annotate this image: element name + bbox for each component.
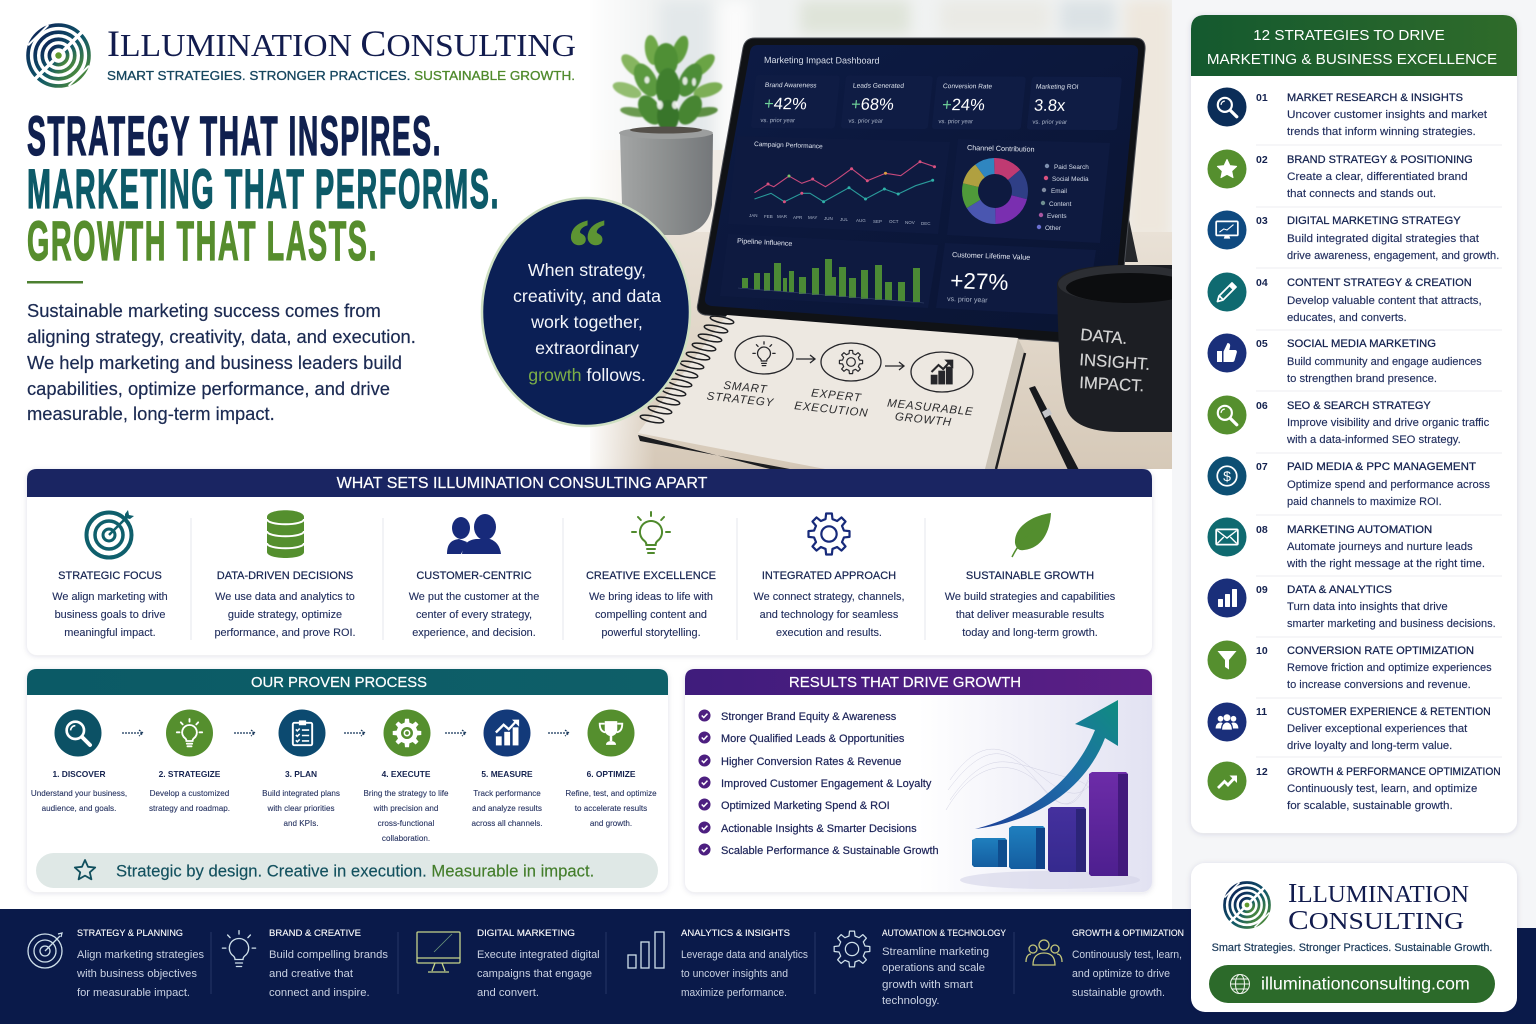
strategy 10: Remove friction and optimize experiences: [1287, 662, 1492, 674]
pipeline influence bar chart: Pipeline Influence: [737, 238, 793, 248]
results checklist: Optimized Marketing Spend & ROI: [721, 800, 890, 812]
strategy 03: DIGITAL MARKETING STRATEGY: [1287, 215, 1461, 227]
sketch: measurable growth: GROWTH: [894, 411, 952, 429]
footer: growth & optimization: Continouusly test, learn,: [1072, 949, 1182, 961]
arrow: [445, 730, 466, 736]
step 1 discover: [31, 710, 127, 813]
campaign performance line chart: [728, 136, 950, 234]
step 6 optimize: to accelerate results: [575, 804, 647, 813]
channel contribution donut: Paid Search: [1054, 164, 1089, 171]
process heading: [27, 669, 668, 695]
strategy 01: MARKET RESEARCH & INSIGHTS: [1287, 92, 1463, 104]
sketch arrow: [885, 362, 904, 370]
footer: analytics & insights: ANALYTICS & INSIGHTS: [681, 928, 790, 938]
sustainable growth: that deliver measurable results: [956, 609, 1105, 621]
strategy 01: [1208, 88, 1488, 138]
arrow: [344, 730, 365, 736]
step 4 execute: cross-functional: [378, 819, 435, 828]
headline: STRATEGY THAT INSPIRES.: [27, 104, 442, 167]
strategy 06: [1208, 396, 1490, 446]
strategic focus: [52, 510, 168, 639]
channel contribution donut: Social Media: [1052, 176, 1089, 183]
KPI cards: Marketing ROI: [1036, 84, 1079, 91]
quote text: extraordinary: [535, 338, 639, 358]
step 4 execute: Bring the strategy to life: [363, 789, 449, 798]
strategy 06: 06: [1256, 400, 1268, 412]
brand tagline: SMART STRATEGIES. STRONGER PRACTICES. SUSTAINABLE GROWTH.: [107, 68, 575, 83]
callout bar: [36, 853, 658, 888]
strategy 04: educates, and converts.: [1287, 312, 1407, 324]
strategy 12: GROWTH & PERFORMANCE OPTIMIZATION: [1287, 766, 1501, 778]
intro paragraph: Sustainable marketing success comes from: [27, 300, 381, 321]
results checklist: [698, 709, 939, 857]
strategy 03: [1208, 210, 1499, 262]
integrated approach: We connect strategy, channels,: [754, 591, 904, 603]
panel: 12 strategies: [1191, 15, 1517, 833]
KPI cards: Conversion Rate: [943, 83, 993, 90]
step 4 execute: 4. EXECUTE: [382, 769, 431, 779]
tablet with marketing dashboard: [697, 38, 1145, 345]
card brand name: CONSULTING: [1288, 905, 1464, 935]
strategy 07: [1208, 456, 1490, 508]
strategy 12: for scalable, sustainable growth.: [1287, 800, 1453, 812]
campaign performance line chart: JUL: [840, 217, 848, 222]
customer lifetime value: vs. prior year: [947, 296, 988, 304]
footer: growth & optimization: GROWTH & OPTIMIZATION: [1072, 928, 1184, 938]
campaign performance line chart: JUN: [824, 216, 833, 221]
spiral binding: [640, 315, 734, 424]
creative excellence: We bring ideas to life with: [589, 591, 713, 603]
step 4 execute: [363, 710, 449, 843]
callout bar: Strategic by design. Creative in execution. Measurable in impact.: [116, 862, 594, 880]
strategy 03: drive awareness, engagement, and growth.: [1287, 250, 1499, 262]
coffee mug: Data. Insight. Impact.: IMPACT.: [1079, 373, 1145, 395]
step 4 execute: with precision and: [373, 804, 438, 813]
step 3 plan: Build integrated plans: [262, 789, 340, 798]
intro paragraph: We help marketing and business leaders build: [27, 352, 402, 373]
strategy 10: to increase conversions and revenue.: [1287, 679, 1471, 691]
footer: strategy & planning: [28, 928, 205, 999]
quote text: creativity, and data: [513, 286, 661, 306]
strategy 07: PAID MEDIA & PPC MANAGEMENT: [1287, 461, 1476, 473]
footer: digital marketing: campaigns that engage: [477, 968, 592, 980]
sketch: expert execution: EXECUTION: [794, 400, 869, 420]
step 3 plan: [262, 710, 340, 828]
footer: growth & optimization: [1026, 928, 1184, 999]
strategy 05: [1208, 334, 1482, 385]
strategic focus: We align marketing with: [52, 591, 168, 603]
sketch: smart strategy: SMART: [723, 380, 768, 396]
results checklist: Stronger Brand Equity & Awareness: [721, 711, 897, 723]
step 3 plan: with clear priorities: [266, 804, 335, 813]
footer: analytics & insights: to uncover insights and: [681, 968, 788, 980]
customer-centric: We put the customer at the: [409, 591, 539, 603]
footer: brand & creative: [222, 928, 389, 999]
campaign performance line chart: AUG: [856, 218, 866, 223]
coffee mug: Data. Insight. Impact.: DATA.: [1080, 325, 1128, 348]
KPI cards: [751, 75, 1122, 130]
logo icon: [28, 25, 89, 86]
KPI cards: vs. prior year: [760, 118, 795, 124]
strategy 08: [1208, 518, 1485, 570]
intro paragraph: aligning strategy, creativity, data, and execution.: [27, 326, 416, 347]
card brand name: [1288, 878, 1469, 935]
strategy 04: CONTENT STRATEGY & CREATION: [1287, 277, 1472, 289]
campaign performance line chart: APR: [793, 215, 803, 220]
strategy 06: Improve visibility and drive organic traffic: [1287, 417, 1490, 429]
creative excellence: compelling content and: [595, 609, 707, 621]
strategy 07: 07: [1256, 461, 1268, 473]
footer: digital marketing: Execute integrated digital: [477, 949, 600, 961]
quote text: growth follows.: [528, 365, 646, 385]
strategy 07: paid channels to maximize ROI.: [1287, 496, 1442, 508]
strategic focus: business goals to drive: [55, 609, 165, 621]
campaign performance line chart: FEB: [764, 214, 773, 219]
step 6 optimize: 6. OPTIMIZE: [587, 769, 636, 779]
integrated approach: execution and results.: [776, 627, 882, 639]
integrated approach: and technology for seamless: [760, 609, 899, 621]
strategy 09: [1208, 578, 1496, 630]
strategy 11: CUSTOMER EXPERIENCE & RETENTION: [1287, 706, 1491, 718]
strategy 11: 11: [1256, 706, 1267, 718]
footer: growth & optimization: sustainable growth.: [1072, 987, 1165, 999]
growth chart with arrow: [946, 700, 1140, 889]
campaign performance line chart: OCT: [889, 219, 899, 224]
quote text: [513, 260, 661, 385]
sketch: smart strategy: [706, 336, 793, 410]
strategy 11: drive loyalty and long-term value.: [1287, 740, 1452, 752]
footer band: [0, 909, 1536, 1024]
spiral notebook: [638, 315, 1025, 469]
strategy 02: BRAND STRATEGY & POSITIONING: [1287, 154, 1473, 166]
campaign performance line chart: SEP: [873, 219, 882, 224]
customer-centric: center of every strategy,: [416, 609, 532, 621]
strategy 04: Develop valuable content that attracts,: [1287, 295, 1482, 307]
campaign performance line chart: JAN: [749, 213, 758, 218]
quote mark: “: [568, 205, 606, 289]
quote text: work together,: [530, 312, 643, 332]
data-driven decisions: We use data and analytics to: [215, 591, 355, 603]
pen: [1029, 386, 1079, 470]
sketch: expert execution: EXPERT: [811, 387, 862, 405]
strategy 05: to strengthen brand presence.: [1287, 373, 1437, 385]
logo card: [1191, 863, 1517, 1012]
step 5 measure: across all channels.: [471, 819, 543, 828]
coffee mug: Data. Insight. Impact.: [1057, 265, 1198, 432]
strategy 10: CONVERSION RATE OPTIMIZATION: [1287, 645, 1474, 657]
strategic focus: STRATEGIC FOCUS: [58, 570, 162, 582]
footer: strategy & planning: Align marketing strategies: [77, 949, 205, 961]
strategy 06: with a data-informed SEO strategy.: [1286, 434, 1461, 446]
strategy 05: Build community and engage audiences: [1287, 356, 1482, 368]
KPI cards: vs. prior year: [938, 119, 973, 125]
data-driven decisions: DATA-DRIVEN DECISIONS: [217, 570, 353, 582]
headline: [27, 104, 500, 272]
customer-centric: experience, and decision.: [412, 627, 536, 639]
step 6 optimize: Refine, test, and optimize: [565, 789, 657, 798]
results heading: [685, 669, 1152, 695]
campaign performance line chart: Campaign Performance: [754, 141, 823, 150]
step 3 plan: and KPIs.: [283, 819, 319, 828]
strategy 03: Build integrated digital strategies that: [1287, 233, 1480, 245]
strategy 09: Turn data into insights that drive: [1287, 601, 1448, 613]
creative excellence: CREATIVE EXCELLENCE: [586, 570, 716, 582]
strategy 02: [1208, 150, 1473, 200]
data-driven decisions: performance, and prove ROI.: [214, 627, 356, 639]
step 5 measure: 5. MEASURE: [481, 769, 533, 779]
channel contribution donut: Email: [1051, 188, 1067, 195]
hero photo: desk scene: [585, 0, 1172, 469]
sketch arrow: [796, 355, 815, 363]
strategy 02: Create a clear, differentiated brand: [1287, 171, 1468, 183]
strategy 12: [1208, 762, 1501, 812]
step 2 strategize: 2. STRATEGIZE: [159, 769, 221, 779]
strategy 01: Uncover customer insights and market: [1287, 109, 1488, 121]
data-driven decisions: [214, 510, 356, 639]
sketch: measurable growth: [887, 352, 974, 429]
footer: analytics & insights: Leverage data and analytics: [681, 949, 809, 961]
apart heading: [27, 469, 1152, 497]
footer: analytics & insights: [628, 928, 809, 999]
strategy 10: [1208, 640, 1492, 691]
sketch: measurable growth: MEASURABLE: [887, 398, 974, 419]
strategy 05: 05: [1256, 338, 1268, 350]
panel: what sets us apart: [27, 469, 1152, 655]
strategies heading: 12 STRATEGIES TO DRIVE: [1253, 27, 1445, 44]
channel contribution donut: Content: [1049, 201, 1072, 208]
step 2 strategize: Develop a customized: [150, 789, 229, 798]
strategy 08: MARKETING AUTOMATION: [1287, 524, 1432, 536]
arrow: [122, 730, 143, 736]
panel: results that drive growth: [685, 669, 1152, 892]
sustainable growth: [945, 513, 1116, 639]
panel: our proven process: [27, 669, 668, 892]
card logo icon: [1224, 882, 1270, 928]
footer: strategy & planning: for measurable impact.: [77, 987, 190, 999]
step 5 measure: [471, 710, 543, 828]
strategy 11: [1208, 702, 1491, 752]
strategies heading: [1191, 15, 1517, 76]
channel contribution donut: Other: [1045, 225, 1062, 232]
pipeline influence bar chart: [720, 234, 938, 308]
card brand name: ILLUMINATION: [1288, 878, 1469, 908]
strategy 04: 04: [1256, 277, 1268, 289]
strategies heading: MARKETING & BUSINESS EXCELLENCE: [1207, 51, 1497, 68]
strategy 09: 09: [1256, 584, 1268, 596]
customer lifetime value: [936, 243, 1096, 316]
step 3 plan: 3. PLAN: [285, 769, 317, 779]
channel contribution donut: Channel Contribution: [967, 143, 1035, 154]
step 1 discover: audience, and goals.: [42, 804, 116, 813]
card tagline: Smart Strategies. Stronger Practices. Sustainable Growth.: [1212, 942, 1492, 954]
campaign performance line chart: MAY: [808, 215, 817, 220]
step 6 optimize: [565, 710, 657, 828]
customer lifetime value: Customer Lifetime Value: [952, 250, 1030, 262]
footer: automation & technology: Streamline marketing: [882, 946, 989, 958]
step 1 discover: 1. DISCOVER: [52, 769, 106, 779]
quote text: When strategy,: [528, 260, 646, 280]
footer: analytics & insights: maximize performance.: [681, 987, 787, 999]
KPI cards: vs. prior year: [1032, 120, 1067, 126]
campaign performance line chart: MAR: [777, 214, 788, 219]
step 1 discover: Understand your business,: [31, 789, 127, 798]
strategy 02: that connects and stands out.: [1287, 188, 1436, 200]
KPI cards: +24%: [941, 95, 986, 114]
results checklist: Improved Customer Engagement & Loyalty: [721, 778, 932, 790]
sketch: expert execution: [794, 343, 881, 420]
strategy 01: trends that inform winning strategies.: [1287, 126, 1476, 138]
strategy 08: with the right message at the right time.: [1286, 558, 1485, 570]
apart heading: WHAT SETS ILLUMINATION CONSULTING APART: [337, 475, 708, 492]
step 2 strategize: [149, 710, 230, 813]
KPI cards: +42%: [763, 94, 808, 113]
footer: growth & optimization: and optimize to drive: [1072, 968, 1170, 980]
campaign performance line chart: NOV: [905, 220, 915, 225]
footer: automation & technology: technology.: [882, 995, 940, 1007]
KPI cards: Brand Awareness: [765, 82, 818, 89]
intro paragraph: capabilities, optimize performance, and drive: [27, 378, 390, 399]
footer: automation & technology: operations and scale: [882, 962, 985, 974]
dashboard title: Marketing Impact Dashboard: [764, 55, 880, 66]
KPI cards: +68%: [850, 95, 895, 114]
quote circle: [482, 198, 690, 426]
step 5 measure: and analyze results: [472, 804, 542, 813]
strategic focus: meaningful impact.: [64, 627, 156, 639]
customer-centric: CUSTOMER-CENTRIC: [416, 570, 532, 582]
strategy 01: 01: [1256, 92, 1268, 104]
footer: brand & creative: BRAND & CREATIVE: [269, 928, 361, 938]
integrated approach: INTEGRATED APPROACH: [762, 570, 896, 582]
footer: brand & creative: and creative that: [269, 968, 353, 980]
footer: digital marketing: [417, 928, 600, 999]
strategy 09: smarter marketing and business decisions.: [1287, 618, 1496, 630]
footer: digital marketing: DIGITAL MARKETING: [477, 928, 575, 938]
creative excellence: [586, 512, 716, 639]
step 5 measure: Track performance: [473, 789, 541, 798]
KPI cards: 3.8x: [1033, 96, 1067, 115]
results checklist: Higher Conversion Rates & Revenue: [721, 756, 901, 768]
brand name: ILLUMINATION CONSULTING: [107, 24, 576, 65]
footer: digital marketing: and convert.: [477, 987, 539, 999]
footer: strategy & planning: STRATEGY & PLANNING: [77, 928, 183, 938]
headline: MARKETING THAT PERFORMS.: [27, 157, 500, 220]
sustainable growth: SUSTAINABLE GROWTH: [966, 570, 1094, 582]
strategy 09: DATA & ANALYTICS: [1287, 584, 1392, 596]
arrow: [234, 730, 255, 736]
KPI cards: Leads Generated: [853, 83, 905, 90]
arrow: [548, 730, 569, 736]
strategy 10: 10: [1256, 645, 1268, 657]
strategy 04: [1208, 272, 1482, 324]
integrated approach: [754, 513, 904, 639]
step 4 execute: collaboration.: [382, 834, 430, 843]
strategy 05: SOCIAL MEDIA MARKETING: [1287, 338, 1436, 350]
step 6 optimize: and growth.: [590, 819, 632, 828]
strategy 08: 08: [1256, 524, 1268, 536]
accent rule: [27, 281, 83, 284]
sketch: smart strategy: STRATEGY: [706, 391, 775, 410]
customer-centric: [409, 514, 539, 639]
strategy 06: SEO & SEARCH STRATEGY: [1287, 400, 1431, 412]
footer: brand & creative: Build compelling brands: [269, 949, 389, 961]
website button: illuminationconsulting.com: [1261, 974, 1470, 994]
sustainable growth: We build strategies and capabilities: [945, 591, 1116, 603]
step 2 strategize: strategy and roadmap.: [149, 804, 230, 813]
results checklist: Scalable Performance & Sustainable Growth: [721, 845, 939, 857]
strategy 03: 03: [1256, 215, 1268, 227]
intro paragraph: [27, 300, 416, 424]
right column background: [1172, 0, 1536, 1024]
results checklist: More Qualified Leads & Opportunities: [721, 733, 905, 745]
customer lifetime value: +27%: [950, 268, 1009, 295]
intro paragraph: measurable, long-term impact.: [27, 403, 275, 424]
footer: automation & technology: [834, 928, 1006, 1007]
results heading: RESULTS THAT DRIVE GROWTH: [789, 674, 1021, 691]
coffee mug: Data. Insight. Impact.: INSIGHT.: [1079, 350, 1151, 374]
headline: GROWTH THAT LASTS.: [27, 209, 378, 272]
strategy 12: Continuously test, learn, and optimize: [1287, 783, 1477, 795]
campaign performance line chart: DEC: [921, 221, 931, 226]
plant in concrete pot: [611, 34, 724, 235]
strategy 11: Deliver exceptional experiences that: [1287, 723, 1468, 735]
KPI cards: vs. prior year: [848, 119, 883, 125]
strategy 12: 12: [1256, 766, 1268, 778]
channel contribution donut: Events: [1047, 213, 1067, 220]
footer: automation & technology: growth with smart: [882, 979, 973, 991]
data-driven decisions: guide strategy, optimize: [228, 609, 342, 621]
results checklist: Actionable Insights & Smarter Decisions: [721, 823, 917, 835]
strategy 08: Automate journeys and nurture leads: [1287, 541, 1473, 553]
footer: automation & technology: AUTOMATION & TECHNOLOGY: [882, 928, 1006, 938]
strategy 07: Optimize spend and performance across: [1287, 479, 1490, 491]
channel contribution donut: [947, 139, 1110, 243]
footer: brand & creative: connect and inspire.: [269, 987, 370, 999]
creative excellence: powerful storytelling.: [601, 627, 701, 639]
process heading: OUR PROVEN PROCESS: [251, 675, 427, 691]
strategy 02: 02: [1256, 154, 1268, 166]
sustainable growth: today and long-term growth.: [962, 627, 1098, 639]
website button: [1209, 965, 1495, 1003]
footer: strategy & planning: with business objectives: [76, 968, 198, 980]
